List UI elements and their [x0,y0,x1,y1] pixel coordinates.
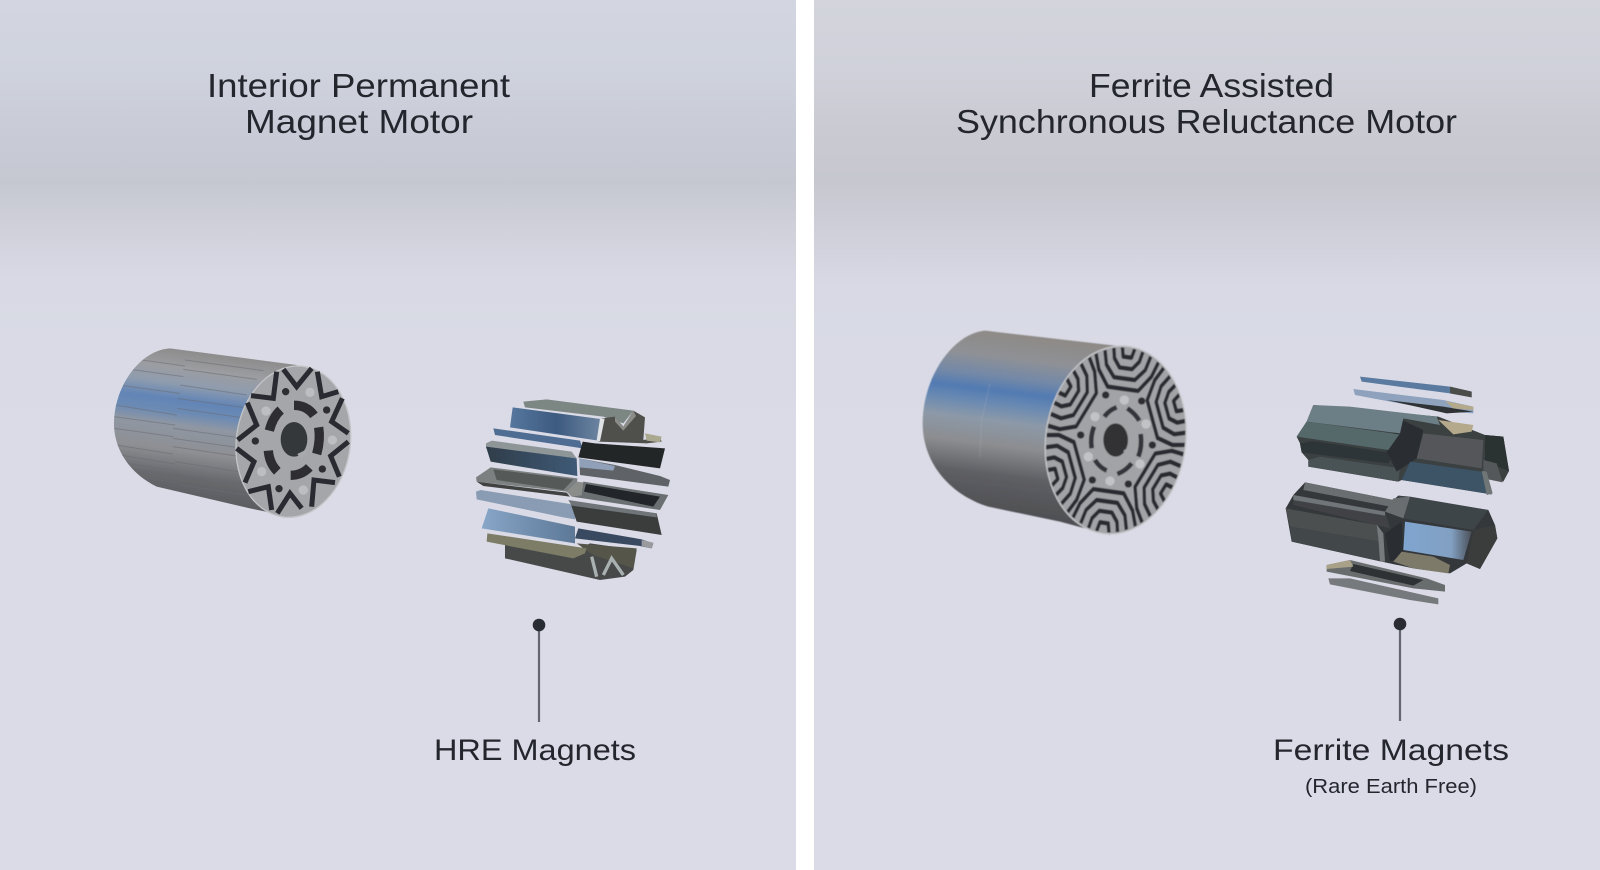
label: ferrite magnets [1273,734,1509,798]
panel: ferrite assisted synchronous reluctance motor [814,0,1600,870]
heading: interior permanent magnet motor [207,67,510,140]
rotor: interior permanent magnet [114,348,360,525]
label: HRE magnets: HRE Magnets [434,734,636,767]
exploded HRE magnets [476,399,670,580]
label: ferrite magnets: (Rare Earth Free) [1305,776,1477,798]
panel: interior permanent magnet motor [0,0,796,870]
heading: ferrite assisted synchronous reluctance motor: Ferrite Assisted [1089,67,1334,104]
exploded ferrite magnets [1286,377,1509,604]
rotor: ferrite assisted [923,331,1204,543]
leader: HRE magnets [533,619,545,722]
label: ferrite magnets: Ferrite Magnets [1273,734,1509,767]
heading: ferrite assisted synchronous reluctance motor: Synchronous Reluctance Motor [956,103,1457,140]
heading: interior permanent magnet motor: Magnet Motor [245,103,473,140]
heading: interior permanent magnet motor: Interior Permanent [207,67,510,104]
leader: ferrite magnets [1394,618,1406,721]
heading: ferrite assisted synchronous reluctance motor [956,67,1457,140]
